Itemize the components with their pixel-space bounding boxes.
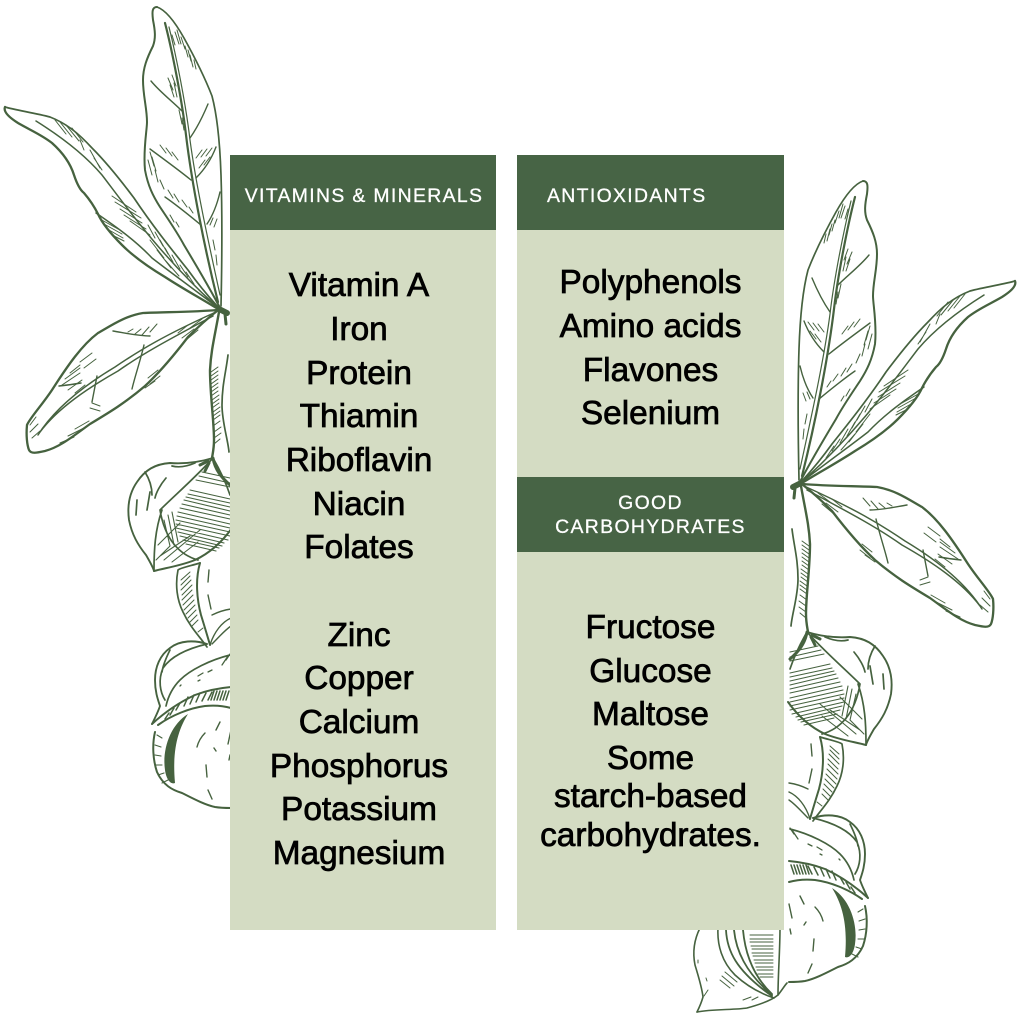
- antioxidants list: Amino acids: [560, 308, 741, 345]
- panel: antioxidants and good carbohydrates: [517, 155, 784, 930]
- antioxidants list: [559, 264, 741, 432]
- heading: good carbohydrates: [517, 477, 784, 552]
- vitamins list: Riboflavin: [286, 442, 432, 479]
- vitamins list: Iron: [330, 311, 388, 348]
- vitamins list: Phosphorus: [270, 748, 448, 785]
- vitamins list: Vitamin A: [289, 267, 429, 304]
- panel: vitamins & minerals: [230, 155, 496, 930]
- carbohydrates list: Some: [607, 740, 694, 777]
- vitamins list: Zinc: [327, 617, 391, 654]
- vitamins list: Magnesium: [273, 835, 445, 872]
- heading: good carbohydrates: CARBOHYDRATES: [555, 516, 746, 538]
- vitamins list: Potassium: [281, 791, 437, 828]
- heading: good carbohydrates: GOOD: [618, 492, 683, 514]
- carbohydrates list: Fructose: [586, 609, 715, 646]
- carbohydrates list: [540, 609, 761, 854]
- vitamins list: Folates: [304, 529, 414, 566]
- antioxidants list: Selenium: [581, 395, 720, 432]
- heading: antioxidants: ANTIOXIDANTS: [547, 185, 706, 207]
- carbohydrates list: carbohydrates.: [540, 817, 761, 854]
- heading: antioxidants: [517, 155, 784, 230]
- carbohydrates list: Maltose: [592, 696, 709, 733]
- bottom nut husk: [694, 928, 787, 1012]
- vitamins list: Niacin: [313, 486, 405, 523]
- antioxidants list: Flavones: [583, 352, 718, 389]
- vitamins list: [270, 267, 448, 872]
- heading: vitamins & minerals: VITAMINS & MINERALS: [245, 185, 483, 207]
- vitamins list: Copper: [304, 660, 414, 697]
- carbohydrates list: starch-based: [554, 778, 747, 815]
- right plant: [788, 181, 1015, 982]
- carbohydrates list: Glucose: [589, 653, 712, 690]
- heading: vitamins & minerals: [230, 155, 496, 230]
- vitamins list: Calcium: [299, 704, 419, 741]
- antioxidants list: Polyphenols: [560, 264, 741, 301]
- vitamins list: Protein: [306, 355, 412, 392]
- vitamins list: Thiamin: [300, 398, 418, 435]
- left plant: [5, 7, 232, 808]
